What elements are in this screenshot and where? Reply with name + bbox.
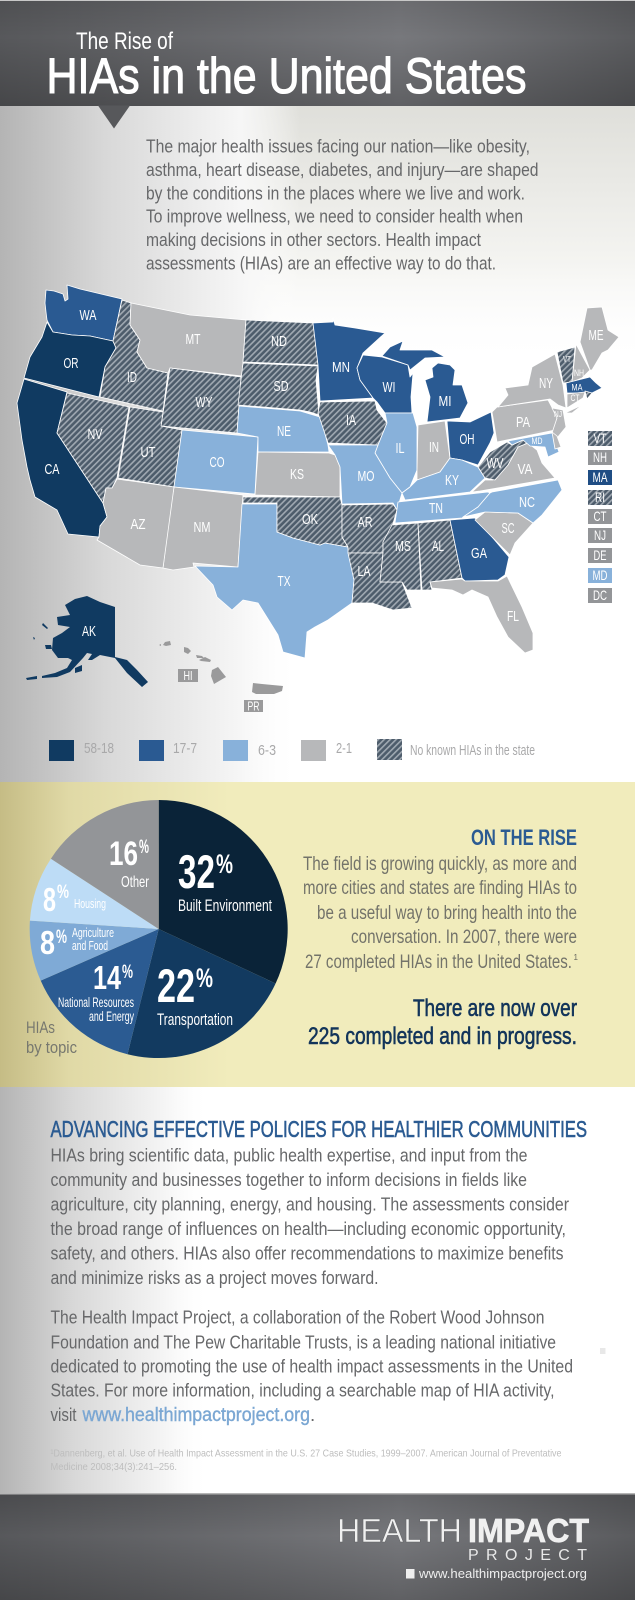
- label transportation: 22: [157, 959, 195, 1012]
- state IL: IL: [396, 441, 404, 457]
- state AR: [342, 504, 397, 553]
- footnote: ¹Dannenberg, et al. Use of Health Impact Assessment in the U.S. 27 Case Studies, 1999–2007. American Journal of Preventative: [50, 1448, 562, 1460]
- state WI: [357, 355, 413, 413]
- state VT: [557, 347, 575, 383]
- state MS: [380, 523, 421, 590]
- footer logo: HEALTH: [337, 1512, 462, 1549]
- state WY: [161, 368, 241, 433]
- state UT: UT: [140, 445, 156, 461]
- legend 58-18: 58-18: [84, 740, 114, 757]
- state OK: [243, 497, 348, 547]
- pie chart: HIAs by topic: [30, 800, 288, 1058]
- label housing: 8: [43, 881, 56, 918]
- state NE: [237, 406, 329, 452]
- intro text: To improve wellness, we need to consider health when: [146, 206, 523, 227]
- state SD: SD: [274, 379, 288, 395]
- state MI lower: [425, 363, 468, 422]
- state IL: [375, 413, 417, 493]
- label housing: [43, 881, 106, 918]
- label other: [109, 835, 149, 891]
- on the rise text: 1: [574, 953, 578, 962]
- state CA: [17, 379, 107, 537]
- state CA: CA: [44, 462, 60, 478]
- state AZ: [97, 479, 174, 568]
- state HI: [159, 641, 226, 684]
- state TX: TX: [278, 574, 291, 590]
- state OH: OH: [460, 432, 474, 448]
- label transportation: %: [196, 963, 213, 993]
- northeast state key: [588, 430, 612, 603]
- state KS: KS: [290, 467, 304, 483]
- state WA: [45, 285, 122, 341]
- label natural resources: %: [122, 962, 133, 983]
- intro text: The major health issues facing our nation—like obesity,: [146, 136, 530, 157]
- state NY: [498, 354, 566, 408]
- label built environment: %: [216, 849, 233, 879]
- panel: on the rise: [0, 782, 635, 1087]
- state NM: NM: [194, 520, 210, 536]
- label HI: HI: [184, 669, 192, 683]
- key MA: MA: [592, 469, 608, 485]
- state ME: ME: [588, 328, 604, 344]
- state MN: [313, 318, 385, 401]
- label built environment: 32: [178, 845, 215, 898]
- label agriculture: 8: [40, 924, 55, 961]
- state MO: MO: [358, 469, 374, 485]
- legend no known HIAs: No known HIAs in the state: [410, 742, 535, 759]
- callout: 225 completed: [308, 995, 577, 1050]
- state NV: [57, 393, 129, 503]
- label other: 16: [109, 835, 138, 873]
- state MT: MT: [186, 332, 201, 348]
- state TN: TN: [429, 501, 443, 517]
- body paragraph 2: The Health Impact Project, a collaboration of the Robert Wood Johnson: [50, 1306, 544, 1327]
- slice agriculture 8%: [30, 921, 159, 981]
- header band: [0, 0, 635, 128]
- state SC: [475, 512, 533, 555]
- state WI: WI: [382, 380, 396, 396]
- state NH: [572, 344, 590, 382]
- state WY: WY: [196, 395, 213, 411]
- body paragraph 2: [50, 1306, 573, 1426]
- on the rise text: conversation. In 2007, there were: [351, 926, 577, 948]
- state SD: [238, 363, 319, 415]
- label built environment: Built Environment: [178, 896, 272, 915]
- state KS: [255, 452, 340, 497]
- state CT: CT: [570, 393, 580, 403]
- state DE: [552, 432, 561, 449]
- state ME: [580, 307, 619, 370]
- intro text: [146, 136, 538, 273]
- legend 17-7: [139, 740, 197, 761]
- state OR: [24, 322, 116, 397]
- label PR: PR: [248, 700, 260, 714]
- state LA: LA: [358, 564, 371, 580]
- title: [46, 28, 526, 104]
- state RI: [585, 391, 592, 399]
- legend 58-18: [49, 740, 114, 761]
- pie caption: by topic: [26, 1038, 77, 1057]
- key RI: RI: [595, 489, 605, 505]
- state MA: MA: [572, 382, 582, 392]
- label natural resources: 14: [93, 959, 121, 996]
- state PA: PA: [516, 415, 530, 431]
- label built environment: [178, 845, 272, 915]
- decorative artifact square: [600, 1348, 606, 1354]
- map of the United States: [17, 285, 619, 714]
- state AR: AR: [358, 515, 372, 531]
- key DC: DC: [593, 587, 607, 603]
- key NJ: NJ: [594, 527, 606, 543]
- state MI upper: [382, 341, 445, 370]
- label natural resources: and Energy: [89, 1009, 134, 1024]
- footer logo: [337, 1512, 589, 1564]
- state CT: [567, 392, 585, 408]
- state VT: VT: [563, 354, 571, 364]
- pie caption: [26, 1018, 77, 1057]
- body paragraph 2: States. For more information, including a searchable map of HIA activity,: [50, 1380, 554, 1401]
- label agriculture: Agriculture: [72, 925, 114, 940]
- state KY: KY: [445, 473, 459, 489]
- state PR: [252, 683, 283, 694]
- state VA: VA: [518, 462, 533, 478]
- state WV: [478, 440, 528, 480]
- legend 2-1: 2-1: [336, 740, 352, 757]
- legend 2-1: [301, 740, 352, 761]
- body paragraph 2: visit: [50, 1404, 77, 1425]
- state ID: ID: [127, 370, 137, 386]
- state MD: [508, 433, 559, 457]
- state NJ: [552, 408, 566, 438]
- label HI: [178, 669, 198, 683]
- label other: Other: [121, 874, 149, 891]
- state LA: [348, 553, 412, 610]
- state MT: [130, 303, 246, 376]
- state MN: MN: [332, 360, 350, 376]
- intro text: making decisions in other sectors. Health impact: [146, 229, 482, 250]
- state WV: WV: [486, 456, 504, 472]
- label transportation: Transportation: [157, 1010, 233, 1029]
- label natural resources: National Resources: [58, 995, 134, 1010]
- state NY: NY: [539, 376, 553, 392]
- key DE: DE: [594, 547, 606, 563]
- intro text: assessments (HIAs) are an effective way to do that.: [146, 252, 496, 273]
- key CT: CT: [594, 508, 607, 524]
- state CO: CO: [210, 455, 224, 471]
- key MD: MD: [592, 567, 608, 583]
- key VT: VT: [594, 430, 607, 446]
- state WA: WA: [80, 308, 97, 324]
- state NH: NH: [574, 368, 584, 378]
- state ID: [100, 300, 168, 411]
- state SC: SC: [502, 521, 514, 537]
- state GA: [450, 518, 509, 581]
- state Long Island: [565, 405, 582, 413]
- state OK: OK: [302, 512, 318, 528]
- callout: 225 completed: There are now over: [413, 995, 577, 1022]
- legend 6-3: 6-3: [258, 742, 276, 759]
- footnote: Medicine 2008;34(3):241–256.: [50, 1461, 177, 1473]
- body paragraph 1: and minimize risks as a project moves forward.: [50, 1267, 378, 1288]
- state IA: IA: [346, 413, 356, 429]
- state ND: ND: [271, 334, 287, 350]
- state OR: OR: [64, 356, 78, 372]
- state MO: [328, 445, 402, 510]
- state FL: FL: [507, 609, 519, 625]
- slice built environment 32%: [159, 800, 288, 984]
- footnote: [50, 1448, 562, 1473]
- body paragraph 2: .: [310, 1404, 315, 1425]
- map legend: [49, 739, 535, 761]
- body paragraph 1: HIAs bring scientific data, public health expertise, and input from the: [50, 1145, 528, 1166]
- label agriculture: %: [56, 927, 67, 948]
- state NV: NV: [88, 427, 103, 443]
- title: The Rise of: [76, 28, 173, 55]
- state ND: [243, 320, 318, 365]
- state VA: [472, 443, 555, 492]
- slice transportation 22%: [128, 929, 276, 1058]
- state OH: [447, 412, 494, 465]
- intro text: by the conditions in the places where we live and work.: [146, 182, 525, 203]
- state AK: AK: [82, 624, 96, 640]
- state NE: NE: [277, 424, 291, 440]
- legend no known HIAs: [377, 739, 535, 760]
- label other: %: [139, 837, 149, 858]
- state PA: [492, 400, 557, 442]
- footer logo: IMPACT: [468, 1512, 589, 1549]
- state TX: [195, 504, 354, 658]
- label housing: Housing: [74, 896, 106, 911]
- on the rise text: [303, 853, 578, 973]
- state MS: MS: [395, 539, 411, 555]
- legend 17-7: 17-7: [173, 740, 197, 757]
- state MA: [566, 377, 602, 393]
- state CO: [174, 430, 258, 494]
- label agriculture: [40, 924, 114, 961]
- state AL: [418, 520, 462, 590]
- state AL: AL: [432, 539, 444, 555]
- state MI lower: MI: [438, 394, 452, 410]
- on the rise heading: ON THE RISE: [471, 825, 577, 850]
- state AZ: AZ: [130, 517, 146, 533]
- key RI: [588, 489, 612, 505]
- state TN: [395, 492, 490, 523]
- legend 6-3: [223, 740, 276, 761]
- intro text: asthma, heart disease, diabetes, and injury—are shaped: [146, 159, 538, 180]
- title: HIAs in the United States: [46, 48, 526, 104]
- slice other 16%: [51, 800, 159, 929]
- pie caption: HIAs: [26, 1018, 55, 1037]
- body paragraph 2: www.healthimpactproject.org: [82, 1404, 310, 1426]
- label housing: %: [57, 882, 69, 903]
- label agriculture: and Food: [72, 938, 108, 953]
- footer url with square icon: www.healthimpactproject.org: [418, 1566, 587, 1581]
- slice housing 8%: [30, 859, 159, 929]
- state GA: GA: [471, 546, 487, 562]
- state NM: [163, 487, 243, 570]
- state UT: [118, 407, 182, 487]
- footer band: [0, 1493, 635, 1600]
- footer logo: PROJECT: [468, 1547, 587, 1564]
- state NJ: NJ: [554, 409, 562, 419]
- state FL: [430, 576, 533, 653]
- state NC: [463, 480, 562, 523]
- body paragraph 1: community and businesses together to inform decisions in fields like: [50, 1169, 527, 1190]
- state AK: [26, 596, 148, 687]
- body paragraph 1: [50, 1145, 569, 1288]
- state NC: NC: [519, 495, 535, 511]
- state IN: IN: [429, 440, 439, 456]
- label transportation: [157, 959, 233, 1029]
- state IN: [417, 421, 450, 480]
- slice natural resources 14%: [41, 929, 159, 1054]
- state IA: [318, 401, 387, 445]
- state KY: [402, 458, 485, 500]
- state MD: MD: [532, 436, 543, 447]
- key NH: NH: [593, 449, 607, 465]
- label natural resources: [58, 959, 134, 1024]
